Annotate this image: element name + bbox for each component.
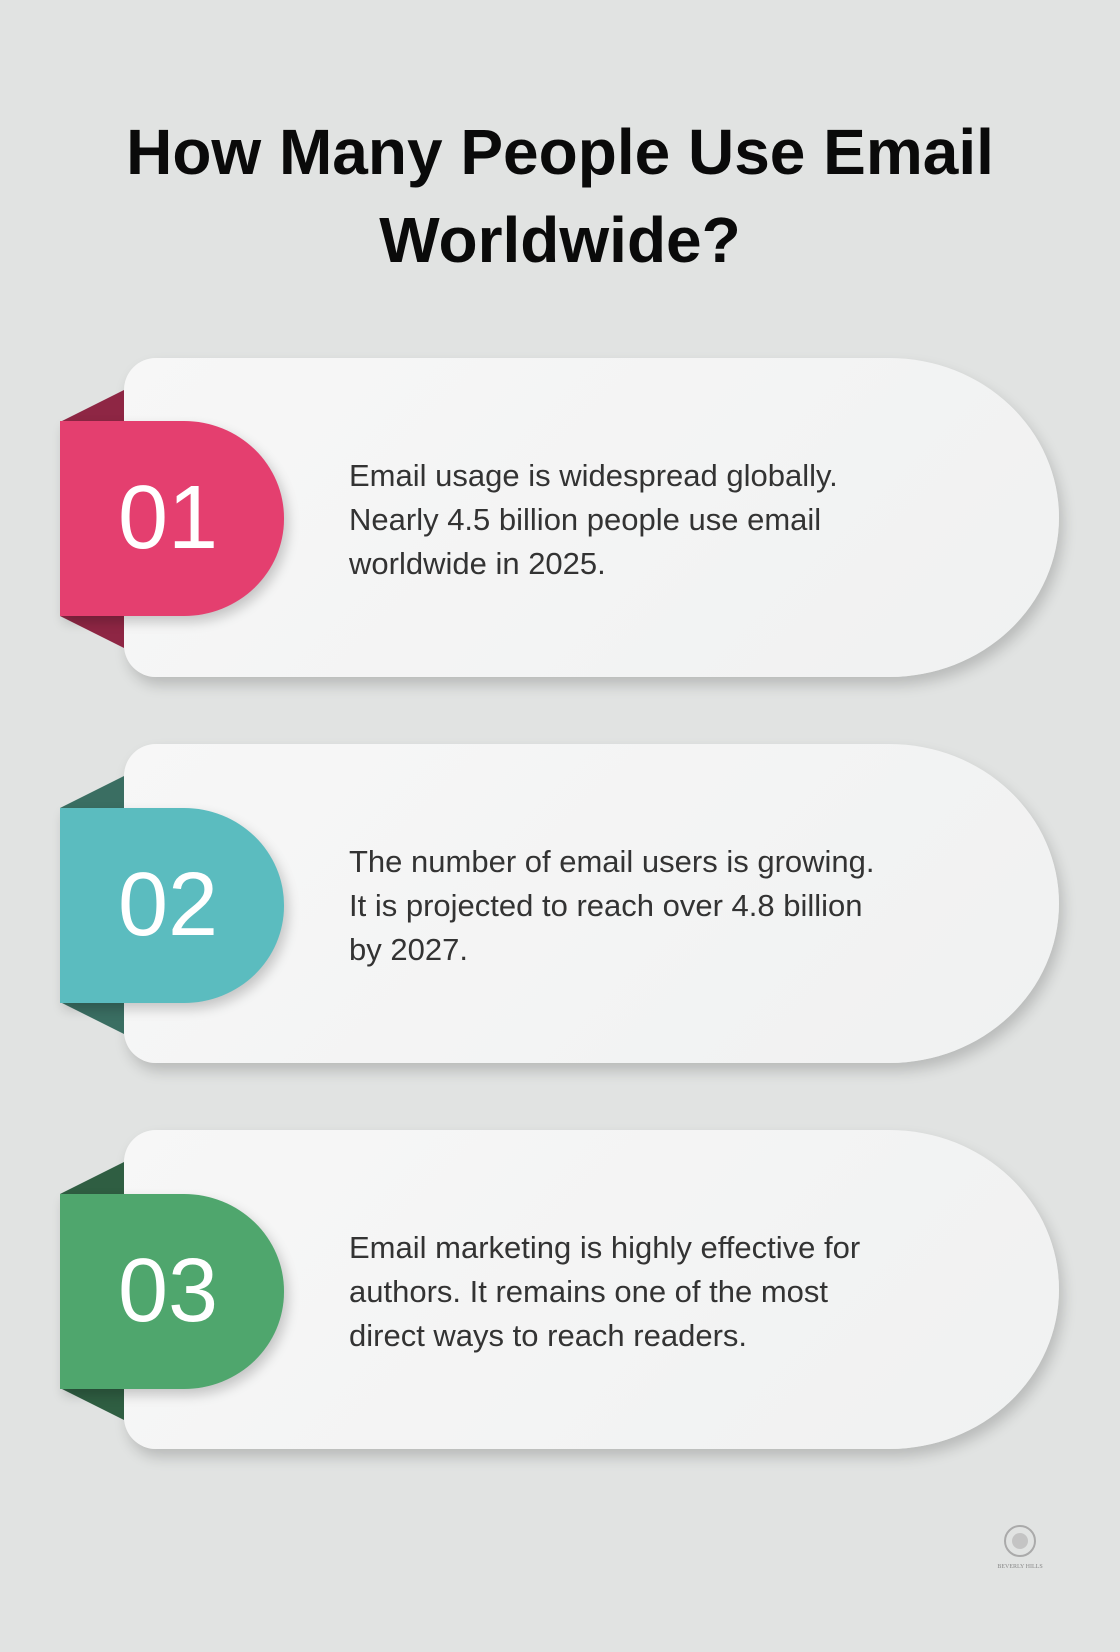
title: Worldwide? [379, 204, 741, 276]
panel: card 2 [124, 744, 1059, 1063]
number tab 03 [60, 1194, 284, 1389]
text: card 3: direct ways to reach readers. [349, 1318, 747, 1353]
logo: BEVERLY HILLS [997, 1564, 1043, 1570]
panel: card 1 [124, 358, 1059, 677]
number tab 01 [60, 421, 284, 616]
logo [997, 1525, 1043, 1570]
title: How Many People Use Email [126, 116, 994, 188]
number tab 01: 01 [118, 468, 218, 568]
fold: card 2 [60, 776, 124, 1034]
text: card 2 [349, 844, 875, 967]
text: card 3: Email marketing is highly effective for [349, 1230, 860, 1265]
text: card 2: by 2027. [349, 932, 468, 967]
title [126, 116, 994, 276]
text: card 3: authors. It remains one of the most [349, 1274, 828, 1309]
number tab 02 [60, 808, 284, 1003]
text: card 1 [349, 458, 838, 581]
text: card 1: Email usage is widespread globally. [349, 458, 838, 493]
fold: card 3 [60, 1162, 124, 1420]
text: card 2: It is projected to reach over 4.8 billion [349, 888, 862, 923]
text: card 2: The number of email users is growing. [349, 844, 875, 879]
fold: card 1 [60, 390, 124, 648]
text: card 1: worldwide in 2025. [349, 546, 606, 581]
number tab 02: 02 [118, 855, 218, 955]
text: card 1: Nearly 4.5 billion people use email [349, 502, 821, 537]
panel: card 3 [124, 1130, 1059, 1449]
number tab 03: 03 [118, 1241, 218, 1341]
text: card 3 [349, 1230, 860, 1353]
